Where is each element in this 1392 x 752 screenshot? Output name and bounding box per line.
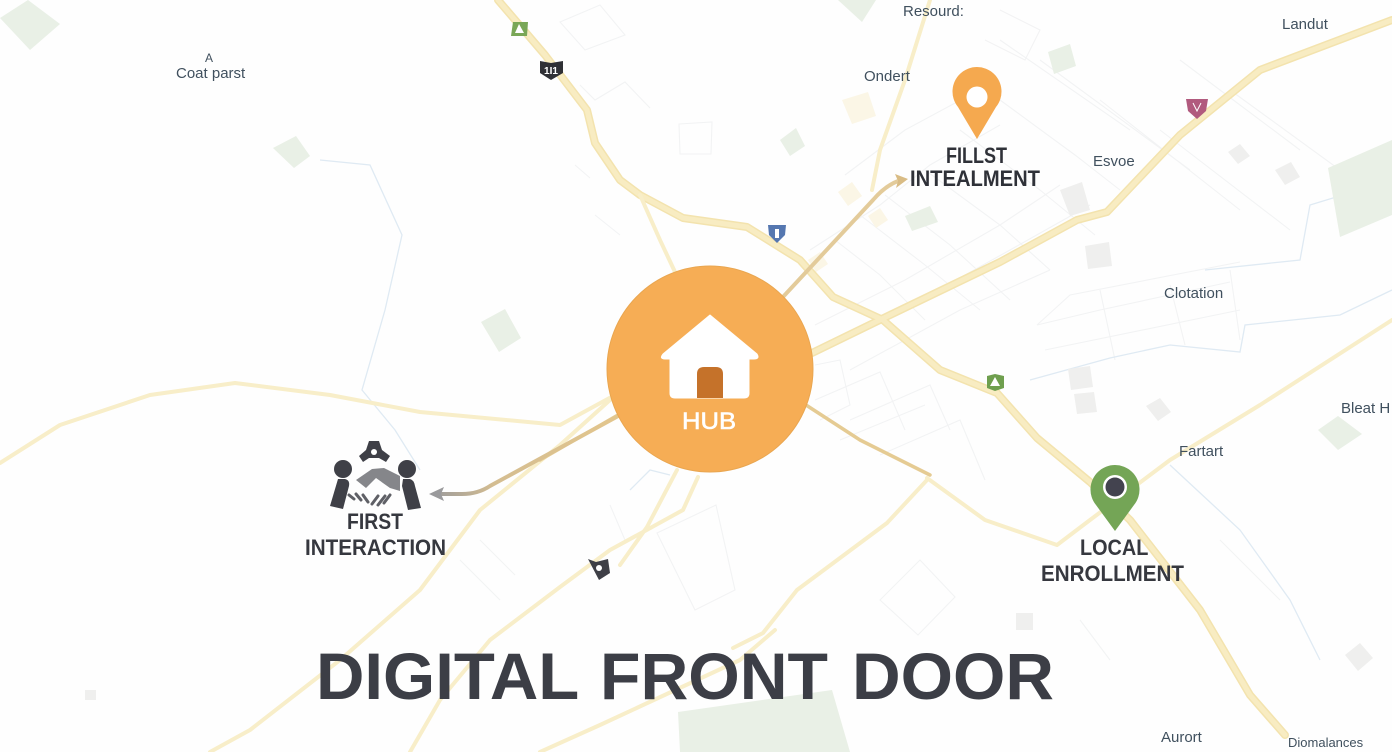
title: FRONT (600, 639, 828, 713)
label: fillst intealment: FILLST (946, 143, 1007, 168)
map place labels: Landut (1282, 16, 1329, 33)
icon: handshake (330, 441, 421, 510)
map place labels: Fartart (1179, 443, 1224, 460)
first intealment group (910, 67, 1041, 191)
small road markers (511, 22, 1208, 580)
label: local enrollment: LOCAL (1080, 535, 1148, 560)
map place labels: Clotation (1164, 285, 1223, 302)
map place labels: Aurort (1161, 729, 1203, 746)
map place labels: Resourd: (903, 3, 964, 20)
marker: black shield: 1I1 (544, 66, 558, 77)
map place labels: A (205, 51, 213, 65)
marker: black shield (540, 61, 563, 80)
map place labels: Esvoe (1093, 153, 1135, 170)
marker: black south (588, 559, 610, 580)
title: DOOR (852, 639, 1054, 713)
icon: orange pin (952, 67, 1001, 139)
first interaction group (305, 441, 446, 560)
icon: green pin (1090, 465, 1139, 531)
local enrollment group (1041, 465, 1185, 586)
icon: house (661, 315, 758, 398)
street grid (460, 5, 1340, 660)
marker: green east (987, 374, 1004, 391)
pale blocks (85, 144, 1373, 700)
marker: pink shield (1186, 99, 1208, 119)
title: DIGITAL (316, 639, 578, 713)
label: first interaction: INTERACTION (305, 535, 446, 560)
hub circle (607, 266, 813, 472)
marker: green north (511, 22, 528, 36)
map place labels: Coat parst (176, 65, 246, 82)
label: fillst intealment: INTEALMENT (910, 166, 1041, 191)
arrow: hub to first interaction (429, 415, 620, 501)
map place labels: Bleat H (1341, 400, 1390, 417)
rivers (320, 160, 1392, 660)
marker: blue shield (768, 225, 786, 243)
label: first interaction: FIRST (347, 509, 403, 534)
map place labels: Diomalances (1288, 735, 1364, 750)
label: local enrollment: ENROLLMENT (1041, 561, 1185, 586)
map place labels: Ondert (864, 68, 911, 85)
hub label: HUB (682, 408, 736, 435)
arrow: hub to first intealment (782, 174, 908, 298)
